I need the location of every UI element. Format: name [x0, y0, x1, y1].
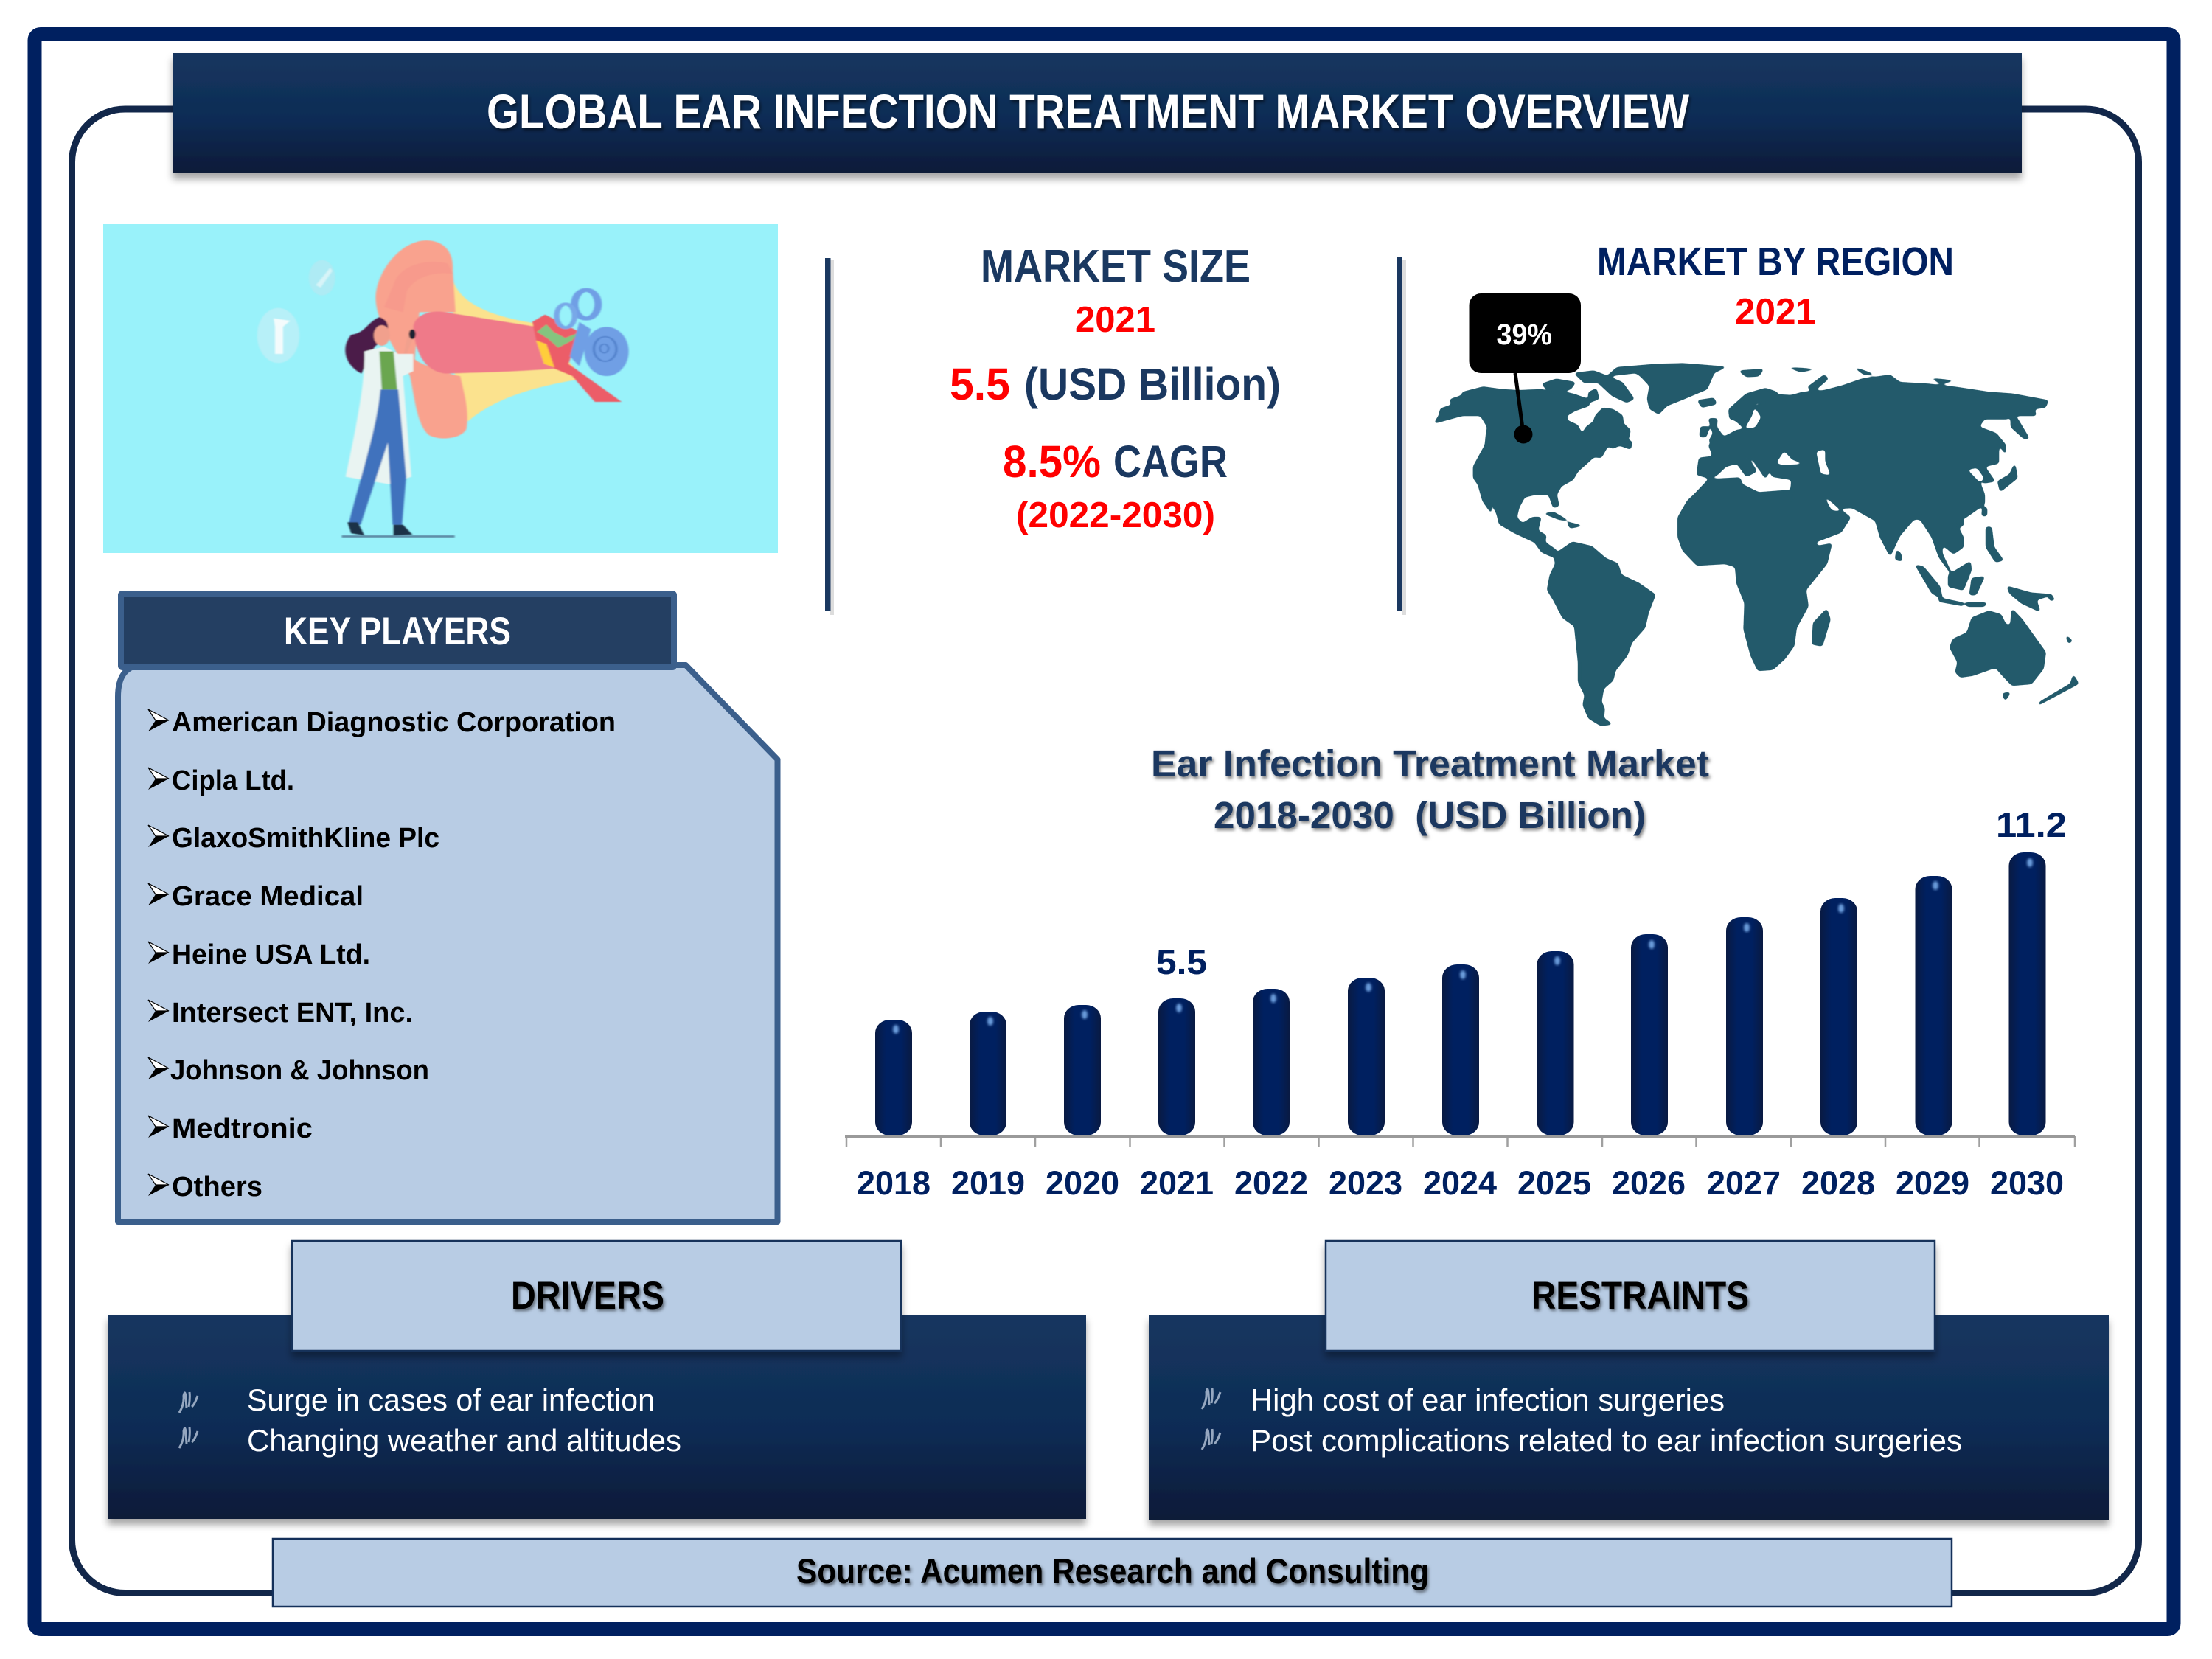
market size year: 2021	[1075, 300, 1155, 340]
icon: outer ear	[375, 240, 467, 439]
doctor figure	[342, 317, 455, 538]
chart title: 2018-2030 (USD Billion)	[1214, 794, 1646, 836]
drivers heading: DRIVERS	[511, 1274, 664, 1318]
bars	[875, 852, 2045, 1135]
drivers bullet 2: Changing weather and altitudes	[247, 1423, 681, 1458]
panel: market size	[950, 241, 1281, 535]
year labels: 2024	[1423, 1164, 1497, 1202]
world map	[1435, 364, 2078, 726]
icon: eardrum	[536, 341, 554, 367]
player: Others: Others	[172, 1172, 262, 1203]
chart axis	[846, 1136, 2075, 1147]
CAGR value: 8.5%	[1003, 437, 1101, 487]
player: Johnson & Johnson: Johnson & Johnson	[170, 1055, 429, 1086]
region year: 2021	[1735, 292, 1816, 332]
player: GlaxoSmithKline Plc: GlaxoSmithKline Plc	[172, 823, 439, 854]
CAGR value: CAGR	[1113, 437, 1228, 487]
key players heading: KEY PLAYERS	[284, 610, 511, 653]
year labels: 2018	[857, 1164, 931, 1202]
market size value: (USD Billion)	[1024, 359, 1281, 409]
year labels: 2023	[1329, 1164, 1402, 1202]
restraints bullet 1: High cost of ear infection surgeries	[1251, 1382, 1725, 1417]
illustration: doctor examining a large ear	[103, 224, 778, 553]
year labels: 2021	[1140, 1164, 1214, 1202]
key players list body	[118, 665, 777, 1222]
player: Intersect ENT, Inc.: Intersect ENT, Inc.	[172, 998, 413, 1029]
icon: ossicles	[537, 324, 578, 348]
panel: market by region	[1435, 240, 2078, 726]
year labels: 2030	[1990, 1164, 2064, 1202]
icon: cochlea	[557, 290, 629, 376]
callout: North America 39%	[1469, 293, 1581, 444]
restraints body	[1149, 1315, 2109, 1520]
drivers heading	[292, 1241, 901, 1351]
key players heading	[121, 594, 674, 667]
market size heading: MARKET SIZE	[981, 241, 1251, 292]
player: Heine USA Ltd.: Heine USA Ltd.	[172, 939, 370, 970]
player: American Diagnostic Corporation: American Diagnostic Corporation	[172, 707, 616, 738]
year labels: 2029	[1896, 1164, 1969, 1202]
icon: middle ear and tube	[532, 315, 622, 402]
market size value: 5.5	[950, 359, 1010, 409]
player: Medtronic: Medtronic	[172, 1113, 313, 1144]
year labels: 2028	[1801, 1164, 1875, 1202]
chart: ear infection treatment market 2018-2030	[845, 742, 2075, 1202]
year labels: 2019	[951, 1164, 1025, 1202]
player: Grace Medical: Grace Medical	[172, 881, 364, 912]
player: Cipla Ltd.: Cipla Ltd.	[172, 765, 294, 796]
title banner: GLOBAL EAR INFECTION TREATMENT MARKET OVERVIEW	[487, 84, 1690, 139]
panel: key players	[118, 594, 777, 1222]
icon: floating instrument bubble	[309, 260, 335, 296]
divider: market size left	[825, 258, 830, 611]
year labels: 2022	[1234, 1164, 1308, 1202]
title banner	[173, 53, 2022, 173]
CAGR period: (2022-2030)	[1016, 495, 1215, 535]
restraints heading	[1326, 1241, 1935, 1351]
year labels: 2025	[1517, 1164, 1591, 1202]
year labels	[857, 1164, 2064, 1202]
region heading: MARKET BY REGION	[1597, 240, 1954, 284]
value label 2021: 5.5	[1156, 942, 1207, 981]
divider: market by region left	[1397, 257, 1402, 611]
panel: restraints	[1149, 1241, 2109, 1520]
key players list	[148, 707, 616, 1203]
icon: inner fold of the ear	[384, 262, 453, 312]
callout: North America 39%: 39%	[1497, 319, 1552, 351]
icon: floating otoscope bubble	[257, 308, 299, 363]
icon: ear canal	[413, 311, 554, 374]
drivers bullet 1: Surge in cases of ear infection	[247, 1382, 655, 1417]
icon: yellow ear tissue	[452, 278, 584, 422]
panel: drivers	[108, 1241, 1086, 1519]
chart title: Ear Infection Treatment Market	[1151, 742, 1709, 785]
source bar	[273, 1539, 1952, 1607]
restraints heading: RESTRAINTS	[1531, 1274, 1749, 1318]
source bar: Source: Acumen Research and Consulting	[796, 1551, 1429, 1590]
year labels: 2026	[1612, 1164, 1686, 1202]
CAGR value	[1003, 437, 1228, 487]
year labels: 2020	[1046, 1164, 1119, 1202]
restraints bullet 2: Post complications related to ear infection surgeries	[1251, 1423, 1962, 1458]
value label 2030: 11.2	[1996, 805, 2067, 844]
drivers body	[108, 1315, 1086, 1519]
bar highlights	[893, 858, 2033, 1034]
year labels: 2027	[1707, 1164, 1781, 1202]
chart title	[1151, 742, 1709, 836]
